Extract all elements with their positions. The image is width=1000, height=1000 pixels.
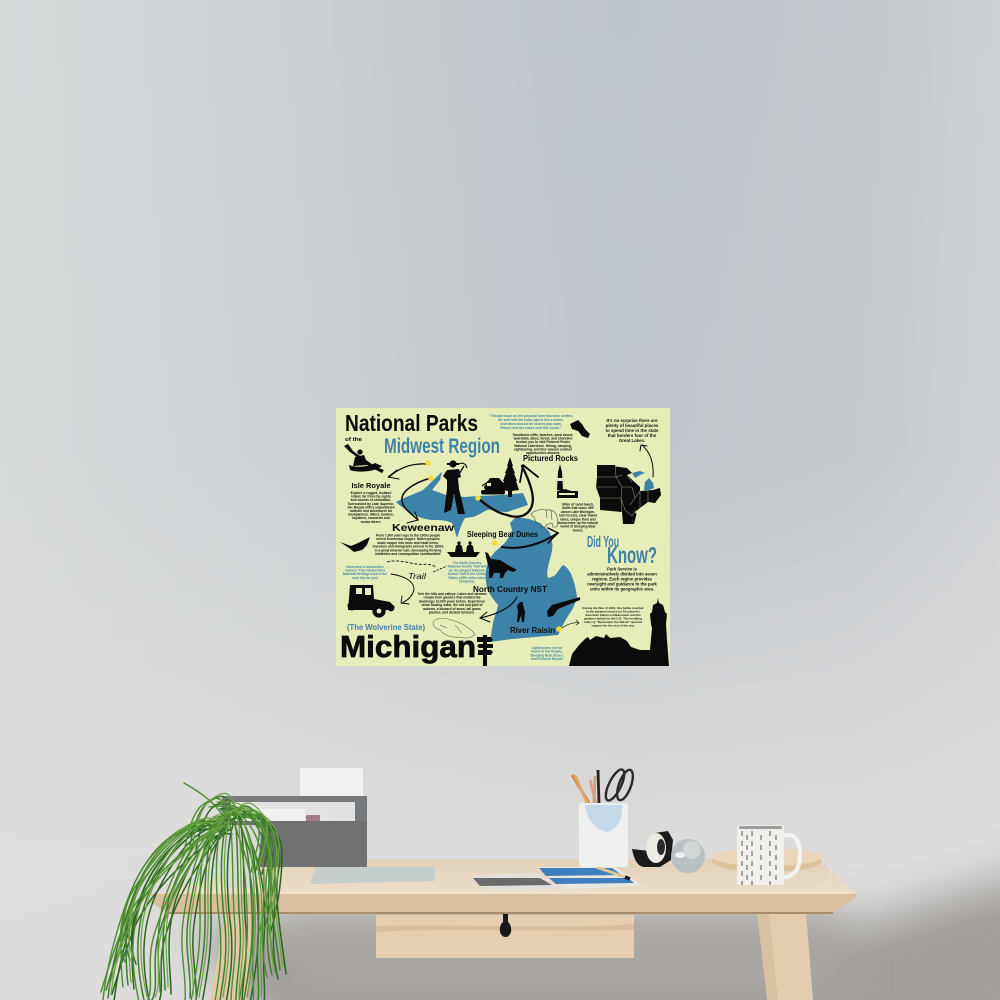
tape dispenser xyxy=(632,831,673,867)
text: automotive note: road trip for you! xyxy=(352,576,378,580)
text: Sleeping Bear Dunes: lush forests, clear inland xyxy=(559,514,597,518)
text: Sleeping Bear Dunes xyxy=(558,502,598,532)
markers: yellow park dots xyxy=(425,460,562,632)
text: River Raisin history: During the War of 1812, this battle resulted xyxy=(583,606,644,610)
text: Sleeping Bear Dunes: world of Sleeping Bear xyxy=(559,525,596,529)
text: automotive note: Interested in automotive xyxy=(346,565,384,569)
text: Did You Know: Park Service is xyxy=(607,566,638,572)
poster xyxy=(336,408,670,666)
cup: pencils xyxy=(572,770,599,803)
text: lighthouse note: and Pictured Rocks! xyxy=(531,657,563,661)
desk organizer xyxy=(222,768,367,867)
text: Sleeping Bear Dunes: fauna make up the natural xyxy=(558,521,598,525)
desk: drawer xyxy=(376,915,634,958)
text: North Country trail: remain from glaciers that molded the xyxy=(423,596,481,600)
text: automotive note: history? Then MotorCities xyxy=(345,569,385,573)
title: Midwest Region: Midwest Region xyxy=(384,435,500,458)
desk: drawer handle xyxy=(500,914,511,937)
text: Sleeping Bear Dunes: Dunes. xyxy=(573,528,584,532)
text: Did You Know: oversight and guidance to the park xyxy=(587,582,657,586)
heading: Pictured Rocks: Pictured Rocks xyxy=(523,454,579,463)
heading: Did You Know: Know? xyxy=(607,542,657,568)
text: North Country trail: landscape 10,000 years before. Experience xyxy=(419,599,485,603)
heading: North Country NST: North Country NST xyxy=(473,584,548,594)
text: surprise note: that borders four of the xyxy=(608,433,657,438)
pencil cup xyxy=(572,767,636,867)
text: Isle Royale: island, far from the sights xyxy=(351,495,391,499)
arrow: to surprise note xyxy=(640,445,653,477)
text: Sleeping Bear Dunes: above Lake Michigan, xyxy=(561,510,595,514)
text: lighthouse note: found at Isle Royale, xyxy=(531,650,563,654)
text: Did You Know: regions. Each region provides xyxy=(592,576,653,582)
text: Isle Royale: Explore a rugged, isolated xyxy=(351,491,391,495)
open brochure and blue notebook xyxy=(473,867,643,890)
desk: left leg xyxy=(210,912,254,1000)
text: Pictured Rocks: National Lakeshore. Hiking, camping, xyxy=(514,444,572,448)
text: Keweenaw: Investors and immigrants arrived in the 1800s xyxy=(373,545,444,549)
text: River Raisin history: in the greatest victory for Tecumseh's xyxy=(586,610,640,614)
arrow: to car xyxy=(391,574,414,604)
text: Keweenaw xyxy=(373,534,444,556)
text: trail note xyxy=(448,561,486,584)
text: lighthouse note: Lighthouses can be xyxy=(532,646,562,650)
text: Keweenaw: industries and cosmopolitan communities. xyxy=(375,552,441,556)
arrow: to Pictured Rocks xyxy=(478,465,538,517)
text: trail note: be the longest National xyxy=(449,568,485,572)
plant: pot xyxy=(192,825,262,888)
icon: wolf xyxy=(485,552,517,578)
poster sheet xyxy=(336,408,670,666)
title: Michigan: Michigan xyxy=(340,629,476,664)
title: National Parks: National Parks xyxy=(345,410,478,436)
chart: midwest states map xyxy=(596,465,661,524)
arrow: to River Raisin note xyxy=(562,620,579,628)
icon: polar bear outline xyxy=(531,510,557,527)
quote: opening verse xyxy=(489,414,573,430)
text: Isle Royale: backpackers, hikers, boaters, xyxy=(348,513,394,517)
text: automotive note: National Heritage Area is the xyxy=(343,572,387,576)
text: trail note: National Scenic Trail will xyxy=(448,565,486,569)
glass sphere xyxy=(671,839,705,873)
text: Pictured Rocks: opportunities abound. xyxy=(526,451,560,455)
text: surprise note xyxy=(606,418,659,443)
arrow: to Isle Royale xyxy=(388,464,426,479)
icon: kayaker xyxy=(344,444,384,473)
quote: opening verse: Please note the Lakes near this house." xyxy=(500,426,562,430)
text: River Raisin history: support for the rest of the war. xyxy=(591,624,635,628)
text: lighthouse note: Sleeping Bear Dunes, xyxy=(530,653,564,657)
heading: Isle Royale: Isle Royale xyxy=(352,481,390,490)
text: Sleeping Bear Dunes: Miles of sand beach, xyxy=(562,502,594,506)
desk: tabletop xyxy=(152,859,856,896)
desk xyxy=(150,859,856,1000)
trail: dashed line xyxy=(387,561,436,567)
text: North Country trail: autumn, a blizzard of snow, tall grass xyxy=(423,607,481,611)
text: North Country trail: Trek the hills and valleys. Lakes and streams xyxy=(417,592,487,596)
desk: front edge xyxy=(150,894,856,913)
label: The Wolverine State: (The Wolverine State) xyxy=(347,623,425,632)
pen xyxy=(596,867,628,878)
icon: Michigan silhouette xyxy=(570,420,590,438)
heading: Did You Know: Did You xyxy=(587,534,619,551)
arrow: to trail text xyxy=(480,597,517,622)
wooden coaster xyxy=(712,848,831,888)
text: Pictured Rocks: beckon you to visit Pictured Rocks xyxy=(516,440,570,444)
title: of the: of the xyxy=(345,437,362,443)
arrow: to Sleeping Bear Dunes xyxy=(502,528,558,548)
mug xyxy=(737,825,800,885)
text: Keweenaw: in a great mineral rush, developing thriving xyxy=(375,548,441,552)
text: Keweenaw: From 7,000 years ago to the 1900s people xyxy=(376,534,440,538)
text: Isle Royale: Surrounded by Lake Superior, xyxy=(348,502,394,506)
quote: opening verse: And when around her shores you roam, xyxy=(500,422,562,426)
text: Keweenaw: mined Keweenaw copper. Native peoples xyxy=(376,537,440,541)
text: Isle Royale: kayakers, canoeists and xyxy=(352,516,390,520)
text: Isle Royale: solitude and adventures for xyxy=(350,509,393,513)
arrow: to Keweenaw xyxy=(402,478,431,523)
text: North Country trail xyxy=(417,592,487,614)
text: Did You Know: units within its geographic area. xyxy=(590,586,654,592)
icon: canoe paddlers xyxy=(447,541,480,557)
mug: body xyxy=(737,825,784,885)
text: River Raisin history: American Indian confederation and the xyxy=(585,613,641,617)
text: surprise note: to spend time in the state xyxy=(606,428,659,433)
heading: River Raisin: River Raisin xyxy=(510,626,555,635)
icon: mining excavator xyxy=(481,478,506,494)
text: Keweenaw: made copper into tools and trade items. xyxy=(377,541,439,545)
icon: vintage car xyxy=(348,585,395,618)
icon: wolverine outline xyxy=(433,618,475,638)
mug: arrow pattern xyxy=(742,831,776,885)
text: North Country trail: prairies, and distant horizons. xyxy=(429,610,475,614)
icon: signpost xyxy=(477,635,493,666)
plant: foliage xyxy=(101,783,286,1000)
text: Isle Royale: scuba divers. xyxy=(361,520,381,524)
text: River Raisin history: greatest defeat for the U.S. The resulting xyxy=(584,616,642,620)
text: North Country trail: clean flowing water, the red and gold of xyxy=(422,603,483,607)
text: Pictured Rocks: Sandstone cliffs, beaches, sand dunes, xyxy=(513,433,573,437)
paper notebook on desk xyxy=(310,867,435,884)
organizer: papers xyxy=(231,802,355,824)
cup: body xyxy=(579,803,628,867)
text: surprise note: It's no surprise there are xyxy=(606,418,658,423)
icon: pine tree xyxy=(501,457,519,497)
icon: cannon xyxy=(547,597,580,617)
icon: large lighthouse and house xyxy=(569,598,669,666)
text: surprise note: Great Lakes. xyxy=(619,438,645,443)
label: Trail: Trail xyxy=(408,572,426,581)
text: Isle Royale xyxy=(348,491,394,524)
text: lighthouse note xyxy=(530,646,564,661)
text: trail note: States (4600 miles when xyxy=(448,576,486,580)
map: lower peninsula xyxy=(486,518,577,642)
text: River Raisin history: rally cry "Remember the Raisin" spurred xyxy=(584,620,642,624)
text: surprise note: plenty of beautiful places xyxy=(606,423,659,428)
mug: handle xyxy=(782,835,800,877)
quote: opening verse: the soft note the lower part is like a mitten. xyxy=(498,418,564,422)
map: upper peninsula xyxy=(396,472,528,538)
text: trail note: complete). xyxy=(459,580,475,584)
organizer: back panel xyxy=(222,796,367,824)
text: River Raisin history xyxy=(583,606,644,628)
desk: back legs xyxy=(757,912,790,1000)
text: trail note: The North Country xyxy=(453,561,482,565)
desk: right leg xyxy=(769,912,813,1000)
plant xyxy=(101,783,286,1000)
organizer: white card xyxy=(300,768,363,798)
quote: opening verse: "Though much on her physical form has been written, xyxy=(489,414,573,418)
text: Isle Royale: and sounds of civilization. xyxy=(351,498,391,502)
text: Sleeping Bear Dunes: bluffs that tower 450' xyxy=(562,506,594,510)
organizer: front panel xyxy=(222,821,367,867)
icon: hiker xyxy=(517,602,525,622)
text: trail note: Scenic Trail in the United xyxy=(448,572,486,576)
heading: Did You Know xyxy=(587,534,657,568)
icon: small lighthouse xyxy=(557,464,578,498)
text: Pictured Rocks xyxy=(513,433,573,455)
cup: scissors xyxy=(602,767,636,803)
icon: miner xyxy=(443,460,467,514)
text: Isle Royale: Isle Royale offers unparalleled xyxy=(348,505,394,509)
text: Pictured Rocks: waterfalls, lakes, forest, and shoreline xyxy=(513,437,573,441)
trail: dashed connector xyxy=(433,566,447,572)
text: Sleeping Bear Dunes: lakes, unique flora and xyxy=(560,517,596,521)
heading: Keweenaw: Keweenaw xyxy=(392,522,455,534)
text: automotive note xyxy=(343,565,387,580)
text: Did You Know xyxy=(587,566,657,592)
text: Did You Know: administratively divided into seven xyxy=(587,572,657,576)
heading: Sleeping Bear Dunes: Sleeping Bear Dunes xyxy=(467,530,538,539)
icon: eagle xyxy=(340,537,370,552)
text: Pictured Rocks: sightseeing, and four season outdoor xyxy=(514,447,573,451)
